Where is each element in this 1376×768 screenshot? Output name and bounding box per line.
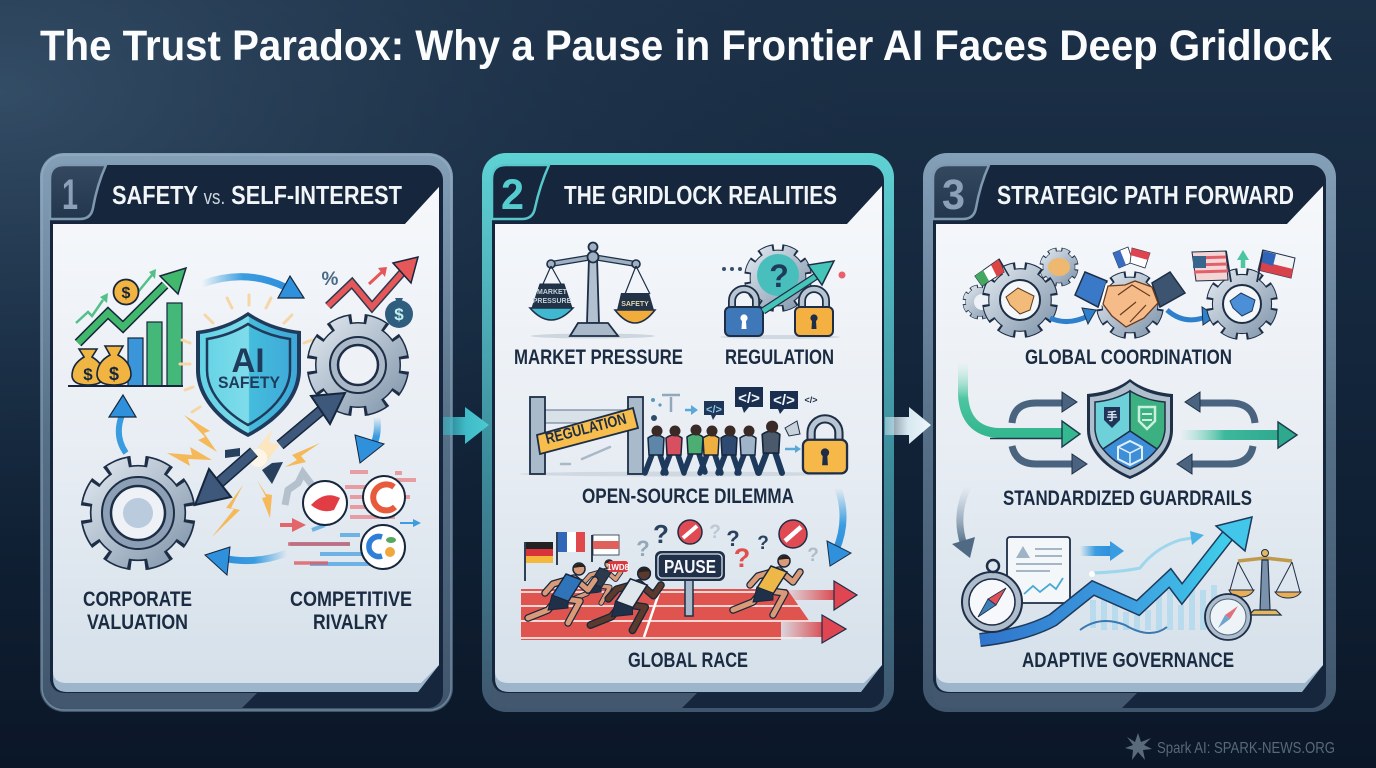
icon: stop signs and question marks: ? [734, 543, 750, 573]
icon: money growth chart: $ [122, 285, 131, 302]
icon: code bubbles: </> [706, 404, 722, 416]
icon: adaptive governance trend [980, 517, 1252, 640]
number tab 2 [492, 165, 549, 219]
arrow: small blue doc arrow [1080, 541, 1124, 561]
icon: locks and regulation gear: ? [769, 258, 789, 294]
icon: open-source lock [803, 419, 847, 473]
icon: AI safety shield: SAFETY [218, 373, 281, 392]
icon: runners: 1WD8 [607, 563, 630, 572]
label: market pressure: MARKET PRESSURE [514, 346, 683, 369]
label: open-source dilemma: OPEN-SOURCE DILEMMA [582, 485, 794, 508]
arrow: grey jagged [285, 473, 312, 505]
icon: code bubbles: </> [804, 395, 818, 405]
panel: 3 strategic path forward [923, 153, 1336, 712]
watermark: Spark AI: SPARK-NEWS.ORG [1157, 740, 1335, 757]
heading 2: THE GRIDLOCK REALITIES [564, 180, 837, 210]
icon: stop signs and question marks: ? [757, 533, 769, 554]
icon: left gear [90, 465, 186, 561]
icon: AI safety shield [196, 312, 301, 437]
arrow: dark clash down-left [195, 448, 283, 505]
icon: money growth chart [68, 268, 186, 386]
icon: code bubbles [651, 387, 818, 421]
icon: lightning bolts and sparks [167, 415, 320, 537]
icon: AI safety shield: AI [232, 342, 264, 380]
arrow: grey curve down [952, 487, 975, 558]
label: corporate valuation: CORPORATE [83, 588, 192, 611]
heading 1: SAFETY vs. SELF-INTEREST [112, 180, 402, 210]
icon: upper right red trend [322, 257, 418, 328]
icon: code bubbles: </> [773, 392, 795, 409]
icon: money growth chart: $ [109, 364, 119, 384]
icon: upper right red trend: $ [394, 305, 404, 324]
label: corporate valuation [83, 588, 192, 634]
arrow: dark clash up-right [280, 393, 345, 445]
number tab 3 [933, 165, 989, 219]
icon: locks and regulation gear [720, 250, 846, 339]
icon: large compass [962, 560, 1022, 632]
icon: balance scale: SAFETY [621, 301, 649, 308]
icon: standardized guardrails shield: 手 [1106, 409, 1118, 423]
icon: pause sign [655, 551, 725, 616]
arrow: top curved blue [202, 276, 304, 298]
icon: rays behind shield [180, 295, 312, 412]
label: regulation: REGULATION [725, 346, 834, 369]
icon: money growth chart: $ [83, 365, 93, 384]
icon: stop signs and question marks: ? [709, 522, 721, 543]
icon: regulation barrier [520, 397, 840, 476]
icon: competitor logos with speed streaks [280, 472, 421, 569]
label: competitive rivalry: RIVALRY [313, 611, 388, 634]
panel: 1 safety vs self-interest [40, 153, 453, 712]
panel: 2 the gridlock realities [482, 153, 894, 712]
label: corporate valuation: VALUATION [87, 611, 188, 634]
heading 3: STRATEGIC PATH FORWARD [997, 180, 1294, 210]
label: global coordination: GLOBAL COORDINATION [1025, 346, 1232, 369]
arrow: green out [1180, 422, 1297, 448]
arrow: teal between panels 1 and 2 [443, 407, 489, 444]
icon: pause sign: PAUSE [664, 557, 716, 577]
icon: balance scale [530, 242, 655, 338]
icon: small scale [1229, 550, 1301, 615]
label: competitive rivalry: COMPETITIVE [290, 588, 412, 611]
icon: national flags [525, 532, 619, 581]
number tab 1 [50, 165, 106, 219]
watermark [1125, 733, 1335, 760]
icon: stop signs and question marks [636, 519, 819, 573]
arrows: dark guardrail loops [1012, 392, 1255, 474]
label: competitive rivalry [290, 588, 412, 634]
number tab 3: 3 [942, 171, 965, 219]
icon: stop signs and question marks: ? [653, 519, 669, 549]
arrow: up blue [109, 395, 136, 453]
arrow: lower left blue [205, 547, 287, 575]
icon: runners [528, 555, 800, 630]
icon: stop signs and question marks: ? [726, 526, 740, 551]
arrow: down blue [355, 417, 384, 463]
icon: small compass [1205, 594, 1251, 640]
label: standardized guardrails: STANDARDIZED GUARDRAILS [1003, 487, 1252, 510]
icon: balance scale: PRESSURE [533, 298, 572, 305]
icon: code bubbles: </> [738, 390, 760, 407]
number tab 2: 2 [501, 171, 524, 219]
icon: stop signs and question marks: ? [636, 536, 650, 561]
icon: standardized guardrails shield [1087, 379, 1173, 479]
arrow: white between panels 2 and 3 [885, 407, 931, 444]
icon: regulation barrier: REGULATION [544, 411, 628, 448]
label: global race: GLOBAL RACE [628, 649, 748, 672]
icon: balance scale: MARKET [537, 289, 568, 296]
number tab 1: 1 [62, 171, 78, 219]
icon: stop signs and question marks: ? [807, 545, 819, 566]
icon: right gear [315, 322, 401, 408]
arrow: green curve in [963, 364, 1080, 447]
arrow: curved down blue [827, 488, 851, 566]
icon: upper right red trend: % [322, 269, 339, 290]
icon: policy document [1007, 537, 1070, 603]
icon: global coordination gears and handshakes [965, 247, 1295, 334]
icon: crowd of people [645, 421, 801, 473]
icon: global race track [521, 581, 857, 643]
label: adaptive governance: ADAPTIVE GOVERNANCE [1022, 649, 1234, 672]
